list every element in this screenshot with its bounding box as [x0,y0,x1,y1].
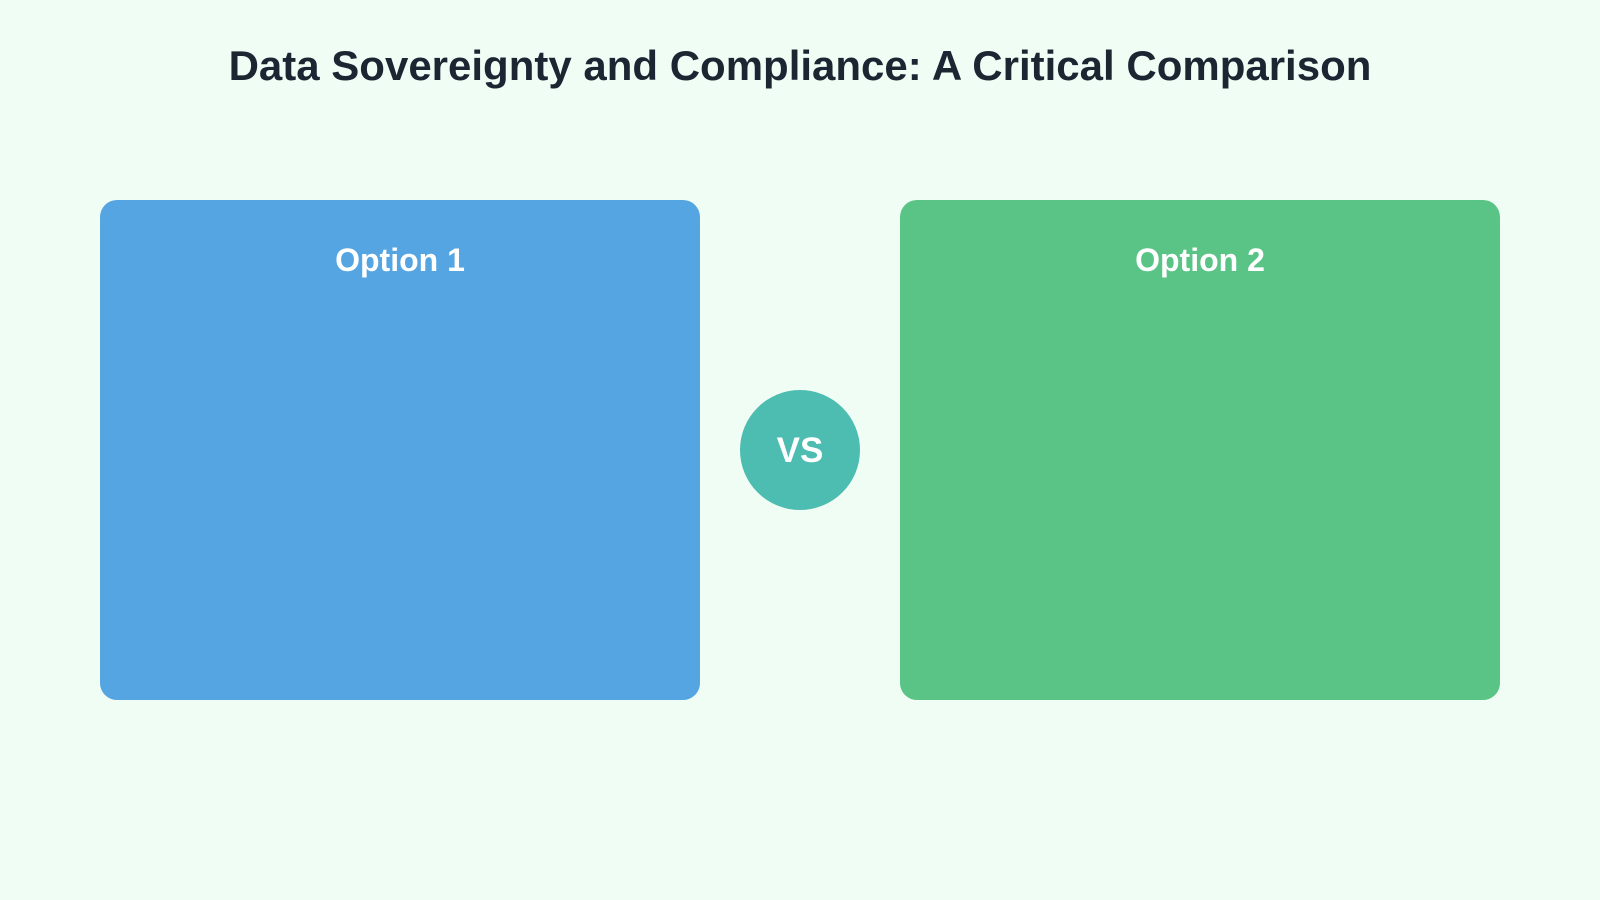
icon: vs circle [740,390,860,510]
panel: option 2 [900,200,1500,700]
icon: vs circle: VS [777,431,823,470]
heading: option 1: Option 1 [335,242,465,278]
heading: option 2: Option 2 [1135,242,1265,278]
panel: option 1 [100,200,700,700]
title: Data Sovereignty and Compliance: A Critical Comparison [229,42,1371,89]
